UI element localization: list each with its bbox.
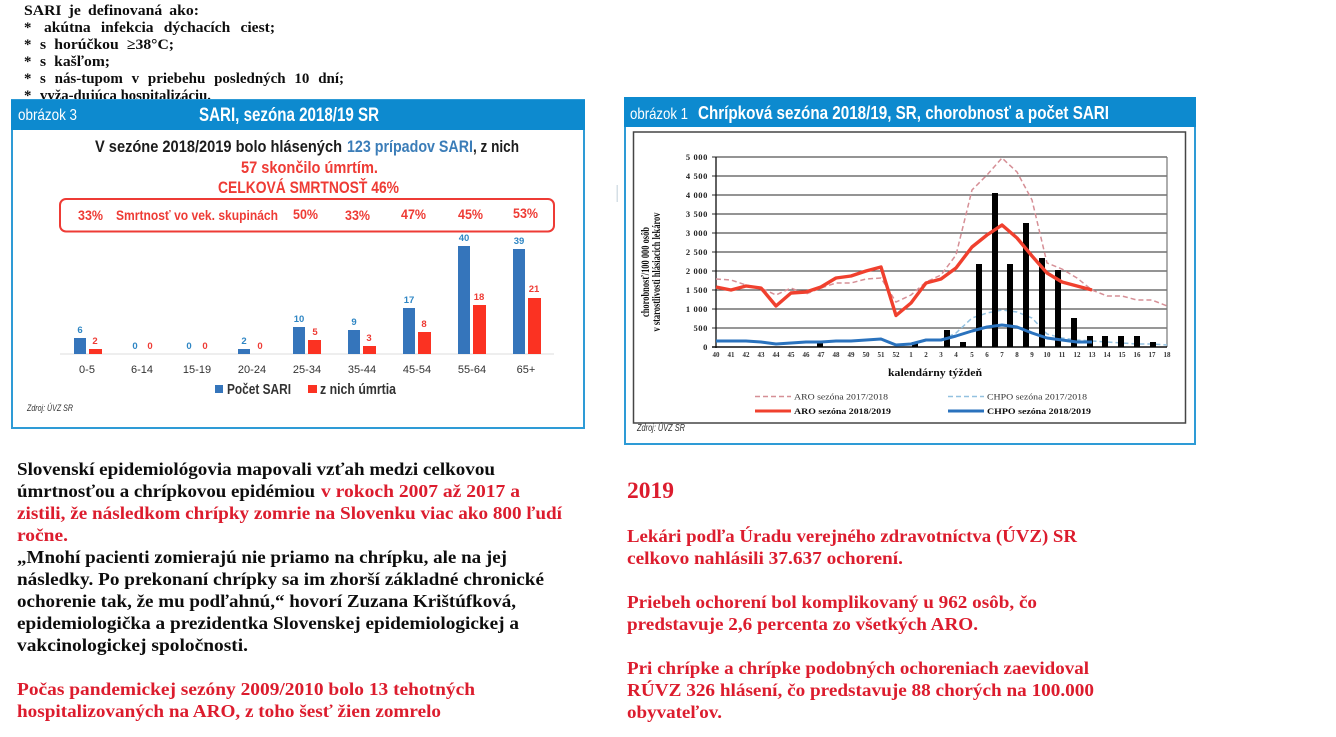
text block: epidemiologists and flu mortality <box>17 459 563 655</box>
text block: 2019 statistics: celkovo nahlásili 37.637 ochorení. <box>627 548 903 568</box>
bar chart: SARI cases and deaths by age: 0-5 <box>79 364 95 376</box>
text block: epidemiologists and flu mortality: „Mnohí pacienti zomierajú nie priamo na chrípku, ale na jej <box>17 547 507 567</box>
x axis labels: 10 <box>1044 351 1051 359</box>
text block: 2019 statistics: Lekári podľa Úradu verejného zdravotníctva (ÚVZ) SR <box>627 525 1078 547</box>
summary text: V sezóne 2018/2019 bolo hlásených <box>95 137 342 156</box>
panel header: SARI, sezóna 2018/19 SR <box>199 105 379 126</box>
chart legend: z nich úmrtia <box>320 381 397 398</box>
bar chart: SARI cases and deaths by age: 65+ <box>517 364 535 376</box>
chart legend: CHPO sezóna 2017/2018 <box>987 392 1087 402</box>
callout: mortality by age group: 50% <box>293 206 318 222</box>
chart legend: ARO sezóna 2018/2019 <box>794 406 891 416</box>
text block: 2019 statistics: obyvateľov. <box>627 702 722 722</box>
text block: SARI definition: s kašľom; <box>40 54 110 70</box>
line and bar chart <box>634 132 1186 423</box>
x axis labels: 3 <box>939 351 943 359</box>
text block: SARI definition <box>24 3 344 104</box>
bar chart: SARI cases and deaths by age: 20-24 <box>238 364 266 376</box>
x axis labels: 11 <box>1059 351 1066 359</box>
bar chart: SARI cases and deaths by age: 17 <box>404 295 414 306</box>
chart legend <box>755 392 1091 416</box>
x axis labels: 18 <box>1164 351 1171 359</box>
line: ARO 2018/19 <box>716 225 1092 316</box>
bar chart: SARI cases and deaths by age: 21 <box>529 284 540 295</box>
callout: mortality by age group: 53% <box>513 205 538 221</box>
text block: pandemic season <box>17 679 475 721</box>
summary text <box>95 137 519 197</box>
bar chart: SARI cases and deaths by age: 35-44 <box>348 364 376 376</box>
callout: mortality by age group: Smrtnosť vo vek. skupinách <box>116 207 278 223</box>
x axis labels: 44 <box>772 351 780 359</box>
chart legend: ARO sezóna 2017/2018 <box>794 392 888 402</box>
bar chart: SARI cases and deaths by age <box>60 233 554 376</box>
text block: SARI definition: s horúčkou ≥38°C; <box>40 37 174 53</box>
bar chart: SARI cases and deaths by age: 0 <box>257 341 263 352</box>
bar chart: SARI cases and deaths by age: 45-54 <box>403 364 431 376</box>
summary text: , z nich <box>473 137 519 156</box>
bar chart: SARI cases and deaths by age: 15-19 <box>183 364 211 376</box>
x axis labels: 45 <box>788 351 795 359</box>
callout: mortality by age group: 47% <box>401 206 426 222</box>
bar chart: SARI cases and deaths by age: 0 <box>186 341 192 352</box>
text block: SARI definition: * <box>24 71 31 87</box>
heading: 2019: 2019 <box>627 478 674 504</box>
text block: epidemiologists and flu mortality: následky. Po prekonaní chrípky sa im zhorší základné chronické <box>17 569 544 589</box>
bar chart: SARI cases and deaths by age: 9 <box>351 317 357 328</box>
callout: mortality by age group <box>60 199 554 232</box>
text block: SARI definition: s nás-tupom v priebehu posledných 10 dní; <box>40 71 344 87</box>
x axis labels: 1 <box>909 351 913 359</box>
x axis labels: 7 <box>1000 351 1004 359</box>
text block: SARI definition: SARI je definovaná ako: <box>24 3 199 19</box>
summary text: 57 skončilo úmrtím. <box>241 158 378 177</box>
x axis labels: 52 <box>892 351 900 359</box>
x axis labels: 15 <box>1118 351 1126 359</box>
callout: mortality by age group: 33% <box>78 207 103 223</box>
x axis labels: 12 <box>1074 351 1081 359</box>
text block: 2019 statistics: Priebeh ochorení bol komplikovaný u 962 osôb, čo <box>627 592 1037 612</box>
text block: SARI definition: * <box>24 88 31 104</box>
bar chart: SARI cases and deaths by age: 0 <box>202 341 208 352</box>
x axis labels: 13 <box>1088 351 1096 359</box>
y axis title: v starostlivosti hlásiacich lekárov <box>651 212 663 332</box>
bars: SARI count <box>817 193 1156 347</box>
x axis labels: 51 <box>878 351 885 359</box>
panel header <box>11 100 585 130</box>
bar chart: SARI cases and deaths by age: 0 <box>132 341 138 352</box>
x axis labels: 14 <box>1104 351 1111 359</box>
x axis labels: 49 <box>848 351 855 359</box>
text block: epidemiologists and flu mortality: vakcinologickej spoločnosti. <box>17 635 248 655</box>
text block: epidemiologists and flu mortality: ročne. <box>17 525 68 545</box>
x axis labels: 40 <box>712 351 720 359</box>
bar chart: SARI cases and deaths by age: 2 <box>241 336 247 347</box>
text block: 2019 statistics: predstavuje 2,6 percenta zo všetkých ARO. <box>627 614 978 634</box>
summary text: CELKOVÁ SMRTNOSŤ 46% <box>218 178 399 197</box>
x axis labels: 17 <box>1148 351 1156 359</box>
text block: 2019 statistics: Pri chrípke a chrípke podobných ochoreniach zaevidoval <box>627 658 1089 678</box>
source note: Zdroj: ÚVZ SR <box>26 403 73 414</box>
y axis title <box>640 212 663 332</box>
text block: epidemiologists and flu mortality: úmrtnosťou a chrípkovou epidémiou <box>17 481 315 501</box>
x axis labels: 5 <box>970 351 974 359</box>
y axis labels: 1 000 <box>686 304 708 314</box>
y axis title: chorobnosť/100 000 osôb <box>640 227 652 317</box>
text block: SARI definition: vyža-dujúca hospitalizáciu. <box>40 88 211 104</box>
source note: Zdroj: ÚVZ SR <box>636 421 685 434</box>
bar chart: SARI cases and deaths by age: 40 <box>459 233 469 244</box>
bar chart: SARI cases and deaths by age: 18 <box>474 292 484 303</box>
chart legend <box>215 381 397 398</box>
x axis labels: 16 <box>1134 351 1141 359</box>
y axis labels: 1 500 <box>686 285 708 295</box>
x axis labels: 42 <box>742 351 750 359</box>
panel header: obrázok 1 <box>630 106 688 123</box>
line: CHPO 2018/19 <box>716 325 1092 345</box>
y axis labels: 2 500 <box>686 247 708 257</box>
y axis labels: 3 000 <box>686 228 708 238</box>
y axis labels: 5 000 <box>686 152 708 162</box>
bar chart: SARI cases and deaths by age: 0 <box>147 341 153 352</box>
y axis labels: 3 500 <box>686 209 708 219</box>
panel: influenza season 2018/19 chart <box>624 97 1196 444</box>
x axis labels: 2 <box>924 351 928 359</box>
panel: SARI season 2018/19 <box>11 100 585 428</box>
bar chart: SARI cases and deaths by age: 6 <box>77 325 83 336</box>
callout: mortality by age group: 45% <box>458 206 483 222</box>
x axis labels: 41 <box>728 351 735 359</box>
x axis labels: 4 <box>954 351 958 359</box>
y axis labels: 4 000 <box>686 190 708 200</box>
y axis labels: 0 <box>703 342 708 352</box>
bar chart: SARI cases and deaths by age: 2 <box>92 336 98 347</box>
chart legend: Počet SARI <box>227 381 291 398</box>
x axis labels: 9 <box>1030 351 1034 359</box>
bar chart: SARI cases and deaths by age: 10 <box>294 314 304 325</box>
callout: mortality by age group: 33% <box>345 207 370 223</box>
text block: epidemiologists and flu mortality: ochorenie tak, že mu podľahnú,“ hovorí Zuzana Krištúfková, <box>17 591 516 611</box>
x axis labels: 46 <box>802 351 810 359</box>
y axis labels: 500 <box>693 323 708 333</box>
bar chart: SARI cases and deaths by age: 3 <box>366 333 372 344</box>
bar chart: SARI cases and deaths by age: 8 <box>421 319 427 330</box>
x axis labels: 47 <box>818 351 825 359</box>
x axis title: kalendárny týždeň <box>888 368 982 379</box>
text block: pandemic season: Počas pandemickej sezóny 2009/2010 bolo 13 tehotných <box>17 679 475 699</box>
line: ARO 2017/18 <box>716 158 1167 306</box>
x axis labels: 43 <box>758 351 765 359</box>
text block: 2019 statistics <box>627 525 1094 722</box>
x axis labels: 8 <box>1015 351 1019 359</box>
x axis labels: 50 <box>862 351 870 359</box>
chart legend: CHPO sezóna 2018/2019 <box>987 406 1091 416</box>
text block: SARI definition: * <box>24 37 31 53</box>
bar chart: SARI cases and deaths by age: 25-34 <box>293 364 321 376</box>
bar chart: SARI cases and deaths by age: 6-14 <box>131 364 153 376</box>
summary text: 123 prípadov SARI <box>347 137 473 156</box>
text block: SARI definition: akútna infekcia dýchacích ciest; <box>44 20 275 36</box>
text block: epidemiologists and flu mortality: zistili, že následkom chrípky zomrie na Slovenku viac ako 800 ľudí <box>17 503 563 523</box>
panel header <box>624 97 1196 127</box>
x axis labels <box>712 351 1171 359</box>
bar chart: SARI cases and deaths by age: 5 <box>312 327 318 338</box>
x axis labels: 6 <box>985 351 989 359</box>
y axis labels: 2 000 <box>686 266 708 276</box>
y axis labels <box>686 152 708 352</box>
text block: 2019 statistics: RÚVZ 326 hlásení, čo predstavuje 88 chorých na 100.000 <box>627 679 1094 700</box>
bar chart: SARI cases and deaths by age: 55-64 <box>458 364 486 376</box>
text block: SARI definition: * <box>24 54 31 70</box>
panel header: Chrípková sezóna 2018/19, SR, chorobnosť a počet SARI <box>698 103 1109 123</box>
text block: SARI definition: * <box>24 20 31 36</box>
bar chart: SARI cases and deaths by age: 39 <box>514 236 524 247</box>
line: CHPO 2017/18 <box>941 310 1167 345</box>
y axis labels: 4 500 <box>686 171 708 181</box>
text block: epidemiologists and flu mortality: v rokoch 2007 až 2017 a <box>321 481 520 501</box>
text block: epidemiologists and flu mortality: epidemiologička a prezidentka Slovenskej epidemiologickej a <box>17 613 519 633</box>
text block: pandemic season: hospitalizovaných na ARO, z toho šesť žien zomrelo <box>17 701 441 721</box>
panel header: obrázok 3 <box>18 107 77 124</box>
text block: epidemiologists and flu mortality: Slovenskí epidemiológovia mapovali vzťah medzi celkovou <box>17 459 495 479</box>
x axis labels: 48 <box>832 351 840 359</box>
